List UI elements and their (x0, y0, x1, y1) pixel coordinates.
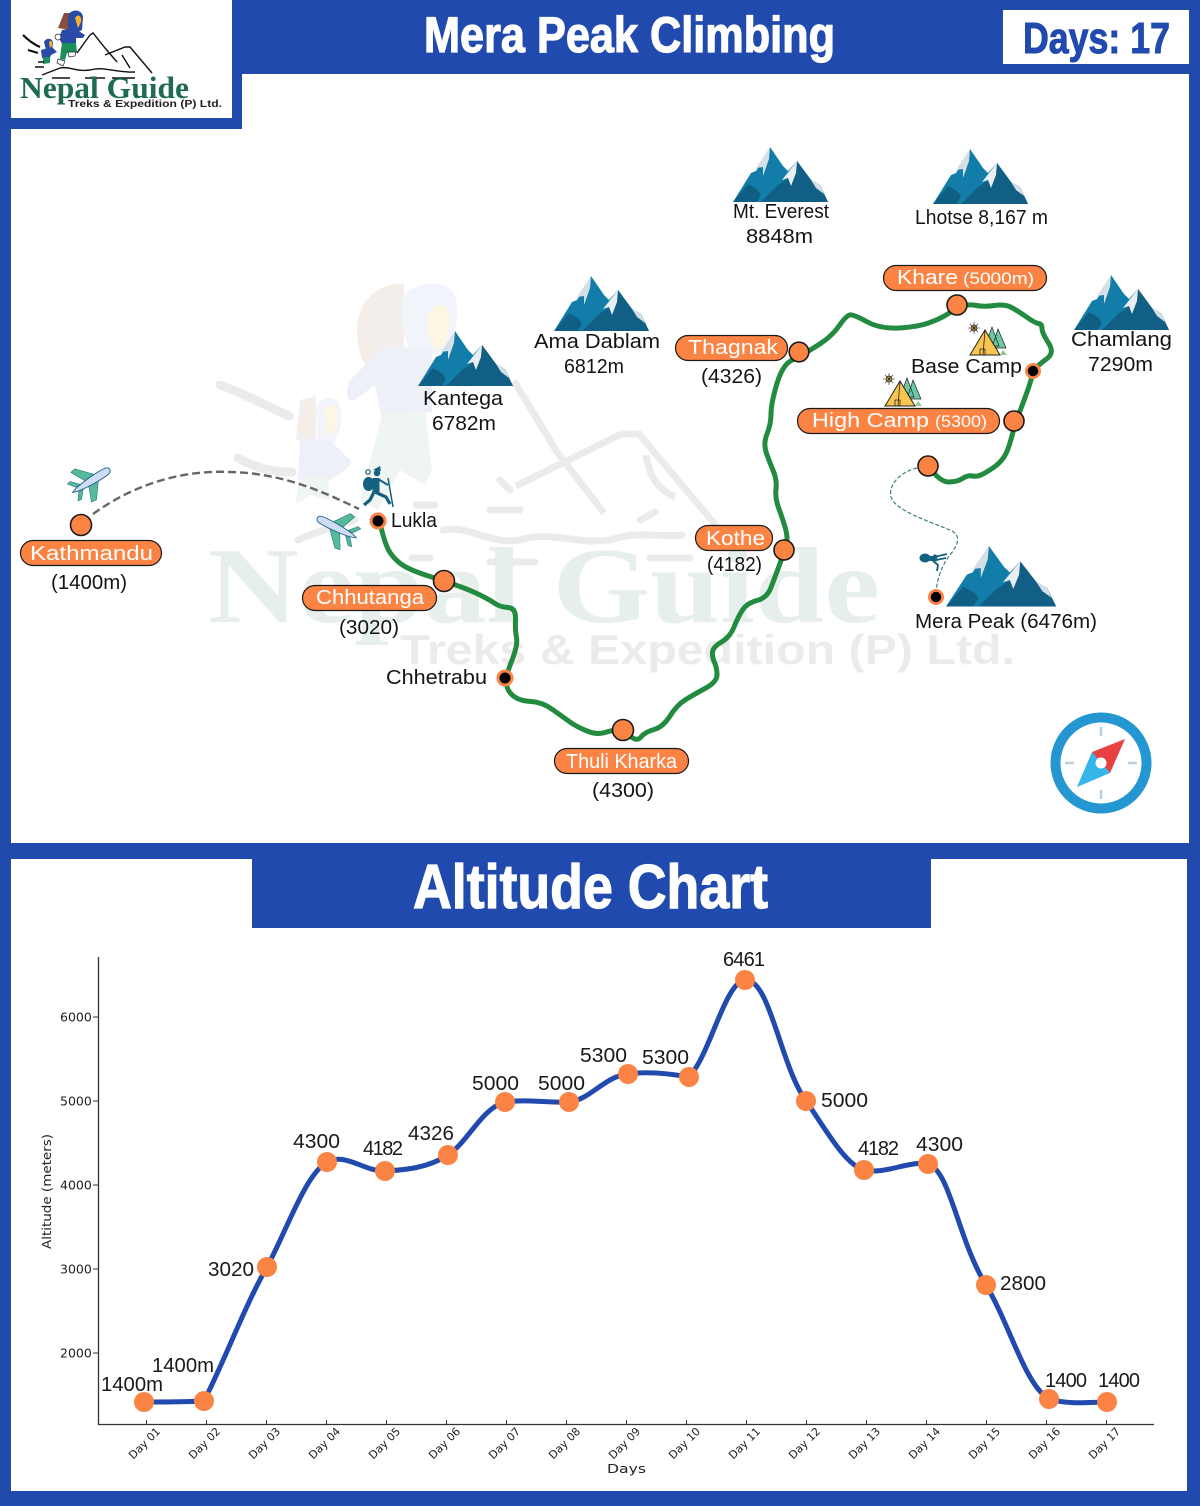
stop: Base Camp: Base Camp (911, 356, 1022, 378)
stop: Lukla (370, 510, 438, 532)
mountain: Ama Dablam: Ama Dablam (534, 331, 660, 353)
x axis labels: Day 16 (1026, 1425, 1063, 1462)
x axis labels: Day 12 (786, 1425, 823, 1462)
stop: Khare (884, 266, 1046, 315)
x axis labels: Day 01 (126, 1425, 163, 1462)
icon: logo mountain (35, 33, 152, 78)
logo (11, 0, 232, 118)
icon: plane near Lukla (309, 501, 365, 555)
watermark: company logo: Nepal Guide (208, 527, 880, 646)
stop: Thuli Kharka (554, 720, 688, 802)
stop: trail end (918, 456, 938, 476)
y axis labels: 5000 (60, 1094, 92, 1108)
days badge: Days: 17 (1023, 14, 1170, 63)
mountain: Kantega: 6782m (432, 413, 496, 435)
stop: Thagnak: Thagnak (688, 337, 779, 359)
stop: Kathmandu (20, 514, 162, 594)
stop: High Camp: (5300) (935, 412, 987, 431)
altitude value labels: 4326 (408, 1123, 454, 1145)
y axis labels: 3000 (60, 1262, 92, 1276)
altitude value labels: 1400m (101, 1374, 163, 1396)
stop: Kathmandu: (1400m) (51, 572, 127, 594)
mountain: Mera Peak (915, 546, 1097, 633)
altitude value labels: 5000 (538, 1073, 585, 1095)
route: green trekking trail (380, 305, 1051, 739)
icon: high camp tent (883, 373, 922, 406)
logo wordmark: Nepal Guide (20, 70, 189, 105)
stop: Thuli Kharka: (4300) (592, 780, 654, 802)
chart axes (93, 957, 1154, 1424)
altitude value labels: 4182 (363, 1138, 403, 1160)
route: dashed summit path (891, 468, 958, 597)
mountain: Lhotse: Lhotse 8,167 m (915, 207, 1048, 229)
mountain: Ama Dablam: 6812m (564, 356, 624, 378)
icon: climber (920, 554, 947, 571)
x axis labels: Day 05 (366, 1425, 403, 1462)
x axis labels: Day 14 (906, 1425, 943, 1462)
mountain: Mt. Everest: 8848m (746, 226, 813, 248)
x axis labels: Day 17 (1086, 1425, 1123, 1462)
y axis labels (39, 1010, 92, 1360)
stop: Kothe: Kothe (706, 528, 765, 550)
stop: High Camp (798, 408, 1024, 434)
altitude value labels: 4300 (293, 1131, 340, 1153)
watermark: company logo (208, 284, 1015, 673)
mountain: Kantega (418, 331, 513, 435)
altitude value labels: 1400m (152, 1355, 214, 1377)
mountain: Chamlang: Chamlang (1071, 329, 1172, 351)
altitude value labels: 5300 (642, 1047, 689, 1069)
stop: Thuli Kharka: Thuli Kharka (566, 751, 678, 773)
route: flight path Kathmandu to Lukla (93, 472, 359, 514)
stop: Chhutanga: (3020) (339, 617, 399, 639)
x axis labels: Day 07 (486, 1425, 523, 1462)
stop: Chhetrabu: Chhetrabu (386, 667, 487, 689)
stop: High Camp: High Camp (812, 410, 929, 432)
heading: Altitude Chart (252, 853, 931, 928)
mountain: Lhotse (915, 149, 1048, 229)
panel: route map (11, 74, 1189, 843)
y axis labels: 4000 (60, 1178, 92, 1192)
logo tagline: Treks & Expedition (P) Ltd. (68, 98, 222, 110)
mountain: Chamlang (1071, 275, 1172, 376)
stop: Thagnak: (4326) (701, 366, 762, 388)
title: Mera Peak Climbing (424, 7, 835, 63)
altitude line (144, 980, 1107, 1403)
altitude value labels: 5000 (472, 1073, 519, 1095)
x axis labels: Day 08 (546, 1425, 583, 1462)
altitude value labels: 1400 (1045, 1370, 1087, 1392)
mountain: Mt. Everest: Mt. Everest (733, 201, 829, 223)
icon: hiker (363, 466, 393, 507)
altitude value labels: 1400 (1098, 1370, 1140, 1392)
y axis labels: 6000 (60, 1010, 92, 1024)
watermark: company logo: Treks & Expedition (P) Ltd. (400, 626, 1015, 673)
panel: altitude chart (11, 853, 1187, 1491)
mountain: Mera Peak: Mera Peak (6476m) (915, 611, 1097, 633)
stop: Khare: Khare (897, 267, 958, 289)
altitude value labels (101, 949, 1140, 1396)
icon: compass (1056, 718, 1146, 808)
stop: Chhutanga: Chhutanga (316, 587, 425, 609)
x axis labels: Day 04 (306, 1425, 343, 1462)
stop: Kothe (696, 526, 794, 576)
mountain: Ama Dablam (534, 276, 660, 378)
icon: plane near Kathmandu (63, 453, 120, 508)
x axis labels: Days (607, 1461, 646, 1476)
x axis labels: Day 15 (966, 1425, 1003, 1462)
x axis labels: Day 02 (186, 1425, 223, 1462)
stop: Mera Peak summit (928, 589, 944, 605)
stop: Khare: (5000m) (963, 269, 1034, 288)
stop: Kathmandu: Kathmandu (30, 543, 153, 565)
logo ridge (23, 35, 40, 53)
x axis labels: Day 03 (246, 1425, 283, 1462)
heading: Altitude Chart: Altitude Chart (413, 853, 768, 922)
stop: Lukla: Lukla (391, 510, 438, 532)
altitude value labels: 3020 (208, 1259, 254, 1281)
stop: Kothe: (4182) (707, 554, 762, 576)
y axis labels: Altitude (meters) (39, 1134, 54, 1249)
altitude value labels: 5000 (821, 1090, 868, 1112)
x axis labels: Day 09 (606, 1425, 643, 1462)
x axis labels: Day 11 (726, 1425, 763, 1462)
altitude value labels: 6461 (723, 949, 765, 971)
mountain: Mt. Everest (733, 147, 829, 248)
stop: Chhutanga (302, 570, 454, 639)
altitude value labels: 5300 (580, 1045, 627, 1067)
altitude value labels: 4300 (916, 1134, 963, 1156)
altitude value labels: 2800 (1000, 1273, 1046, 1295)
mountain: Chamlang: 7290m (1088, 354, 1153, 376)
icon: base camp tent (968, 322, 1007, 355)
x axis labels (126, 1425, 1123, 1476)
altitude markers (134, 970, 1117, 1412)
x axis labels: Day 10 (666, 1425, 703, 1462)
y axis labels: 2000 (60, 1346, 92, 1360)
mountain: Kantega: Kantega (423, 388, 504, 410)
icon: logo climbers (41, 10, 85, 66)
altitude value labels: 4182 (858, 1138, 899, 1160)
x axis labels: Day 06 (426, 1425, 463, 1462)
stop: Thagnak (676, 336, 809, 388)
x axis labels: Day 13 (846, 1425, 883, 1462)
